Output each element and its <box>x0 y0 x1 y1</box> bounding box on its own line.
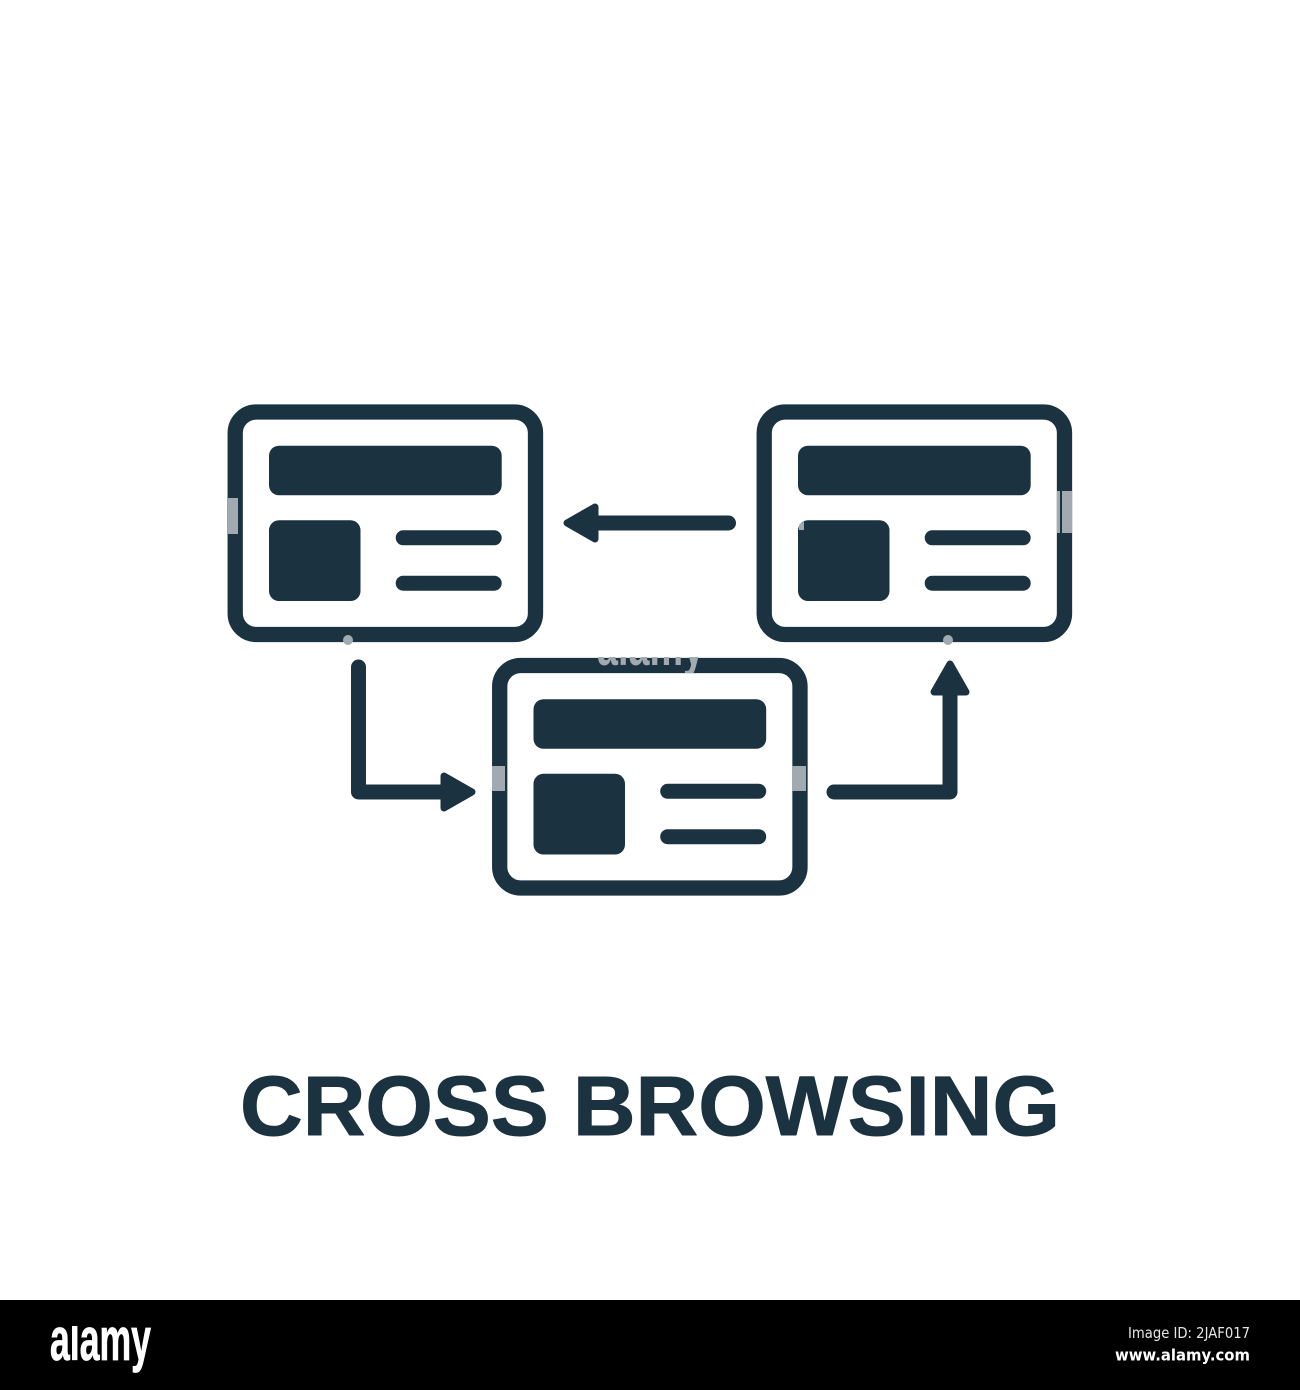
browser window: bottom centre <box>500 666 800 888</box>
infographic canvas <box>0 404 1300 1390</box>
arrow: bottom window to right window <box>834 664 966 792</box>
website: www.alamy.com <box>1115 1346 1250 1364</box>
title: CROSS BROWSING <box>240 1059 1060 1153</box>
browser window: top left <box>235 412 535 634</box>
infographic canvas: alamy <box>597 614 704 677</box>
arrow: right window to left window <box>567 507 728 539</box>
footer bar <box>0 1300 1300 1390</box>
image id: Image ID: 2JAF017 <box>1128 1324 1250 1342</box>
icon: cross browsing diagram <box>235 412 1064 888</box>
footer logo: alamy <box>50 1306 151 1373</box>
arrow: left window to bottom window <box>358 667 472 808</box>
browser window: top right <box>764 412 1064 634</box>
